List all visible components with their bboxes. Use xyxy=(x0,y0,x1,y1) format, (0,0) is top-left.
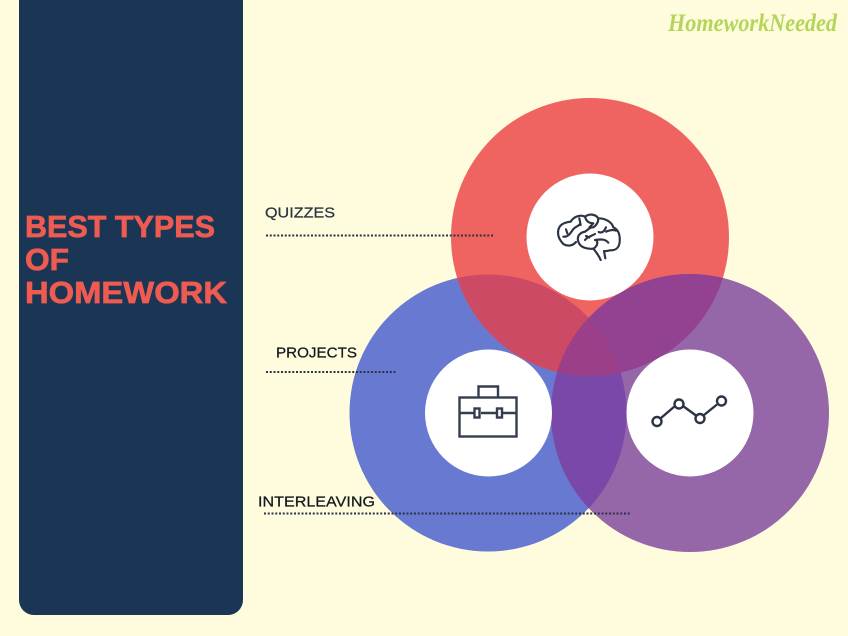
venn diagram xyxy=(350,98,829,552)
heading: best types of homework: OF xyxy=(25,242,69,277)
circle: blue xyxy=(350,274,626,552)
overlap: red and purple xyxy=(560,274,723,372)
white disc: interleaving xyxy=(626,350,754,476)
heading: best types of homework xyxy=(25,209,228,310)
white disc: projects xyxy=(425,350,552,476)
icon: brain xyxy=(558,215,620,260)
dotted leader: projects xyxy=(266,371,397,373)
overlap: red and blue xyxy=(457,274,588,372)
label: interleaving: INTERLEAVING xyxy=(258,494,375,510)
heading: best types of homework: BEST TYPES xyxy=(25,209,215,244)
panel: navy sidebar xyxy=(19,0,243,615)
dotted leader: quizzes xyxy=(266,234,494,236)
icon: line chart xyxy=(652,396,726,426)
heading: best types of homework: HOMEWORK xyxy=(25,275,228,310)
icon: briefcase xyxy=(460,386,516,436)
white disc: quizzes xyxy=(526,174,654,300)
overlap: all three xyxy=(558,318,620,376)
label: projects xyxy=(266,344,397,372)
overlap: blue and purple xyxy=(552,318,626,508)
label: quizzes: QUIZZES xyxy=(265,204,335,222)
circle: red xyxy=(451,98,729,376)
label: projects: PROJECTS xyxy=(276,344,357,362)
circle: purple xyxy=(551,274,829,552)
dotted leader: interleaving xyxy=(264,512,631,514)
